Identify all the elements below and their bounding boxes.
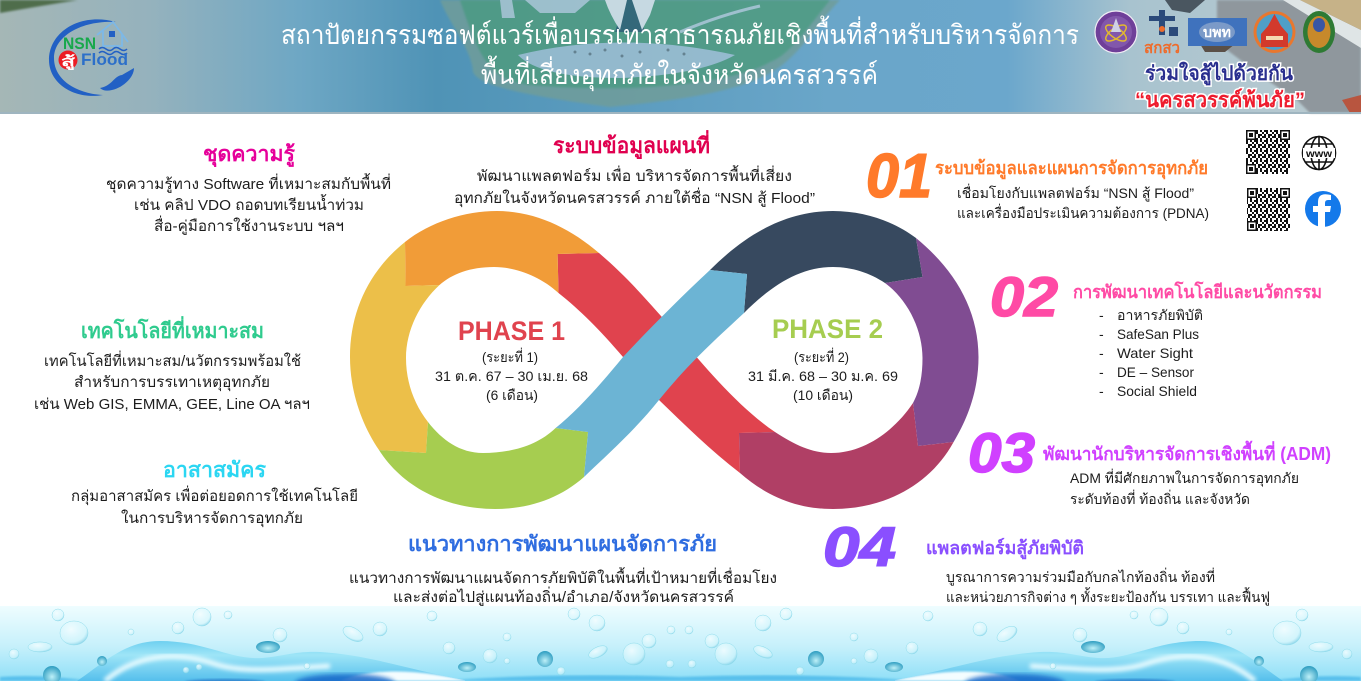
item 03: 03	[968, 421, 1035, 484]
item 02: Social Shield	[1117, 383, 1197, 399]
heading: ระบบข้อมูลแผนที่ block	[454, 129, 815, 208]
item 04: และหน่วยภารกิจต่าง ๆ ทั้งระยะป้องกัน บรรเทา และฟื้นฟู	[946, 587, 1270, 606]
heading: ระบบข้อมูลแผนที่ block: ระบบข้อมูลแผนที่	[553, 129, 710, 160]
heading: แนวทางการพัฒนาแผนจัดการภัย block: แนวทางการพัฒนาแผนจัดการภัยพิบัติในพื้นที่เป้าหมายที่เชื่อมโยง	[349, 567, 777, 587]
heading: อาสาสมัคร block: อาสาสมัคร	[163, 459, 267, 482]
item 01: และเครื่องมือประเมินความต้องการ (PDNA)	[957, 204, 1209, 221]
title	[281, 15, 1079, 92]
partner logos: สกสว	[1144, 40, 1180, 57]
partner logos: บพท	[1203, 24, 1231, 40]
heading: ชุดความรู้ block: ชุดความรู้ทาง Software ที่เหมาะสมกับพื้นที่	[106, 173, 391, 194]
item 01: เชื่อมโยงกับแพลตฟอร์ม “NSN สู้ Flood”	[957, 184, 1194, 202]
item 02: DE – Sensor	[1117, 364, 1194, 380]
phase 2 label: PHASE 2	[772, 314, 883, 344]
heading: ระบบข้อมูลแผนที่ block: อุทกภัยในจังหวัดนครสวรรค์ ภายใต้ชื่อ “NSN สู้ Flood”	[454, 187, 815, 208]
item 01	[866, 142, 1209, 221]
slogan	[1135, 61, 1305, 112]
heading: ระบบข้อมูลแผนที่ block: พัฒนาแพลตฟอร์ม เพื่อ บริหารจัดการพื้นที่เสี่ยง	[477, 165, 792, 185]
item 04: แพลตฟอร์มสู้ภัยพิบัติ	[926, 537, 1084, 560]
heading: อาสาสมัคร block: กลุ่มอาสาสมัคร เพื่อต่อยอดการใช้เทคโนโลยี	[71, 485, 358, 506]
item 02: การพัฒนาเทคโนโลยีและนวัตกรรม	[1073, 281, 1322, 302]
heading: ชุดความรู้ block: สื่อ-คู่มือการใช้งานระบบ ฯลฯ	[154, 215, 344, 235]
phase 2 label: (10 เดือน)	[793, 387, 853, 403]
item 01: 01	[866, 142, 932, 211]
item 01: ระบบข้อมูลและแผนการจัดการอุทกภัย	[935, 158, 1208, 180]
icon: facebook	[1305, 191, 1341, 227]
item 02: 02	[990, 265, 1058, 328]
heading: แนวทางการพัฒนาแผนจัดการภัย block	[349, 533, 777, 606]
heading: อาสาสมัคร block: ในการบริหารจัดการอุทกภัย	[121, 509, 303, 528]
item 02: -	[1099, 383, 1104, 399]
phase 2 label: (ระยะที่ 2)	[794, 348, 849, 365]
heading: เทคโนโลยีที่เหมาะสม block: เทคโนโลยีที่เหมาะสม/นวัตกรรมพร้อมใช้	[44, 350, 301, 370]
logo: NSN สู้ Flood: Flood	[81, 50, 128, 69]
slogan: ร่วมใจสู้ไปด้วยกัน	[1145, 61, 1293, 87]
item 02: -	[1099, 326, 1104, 342]
infinity diagram	[350, 211, 978, 509]
icon: globe www	[1302, 136, 1336, 170]
title: พื้นที่เสี่ยงอุทกภัยในจังหวัดนครสวรรค์	[481, 55, 878, 92]
heading: เทคโนโลยีที่เหมาะสม block: เทคโนโลยีที่เหมาะสม	[81, 315, 264, 343]
heading: เทคโนโลยีที่เหมาะสม block	[34, 315, 310, 413]
phase 1 label: (ระยะที่ 1)	[482, 348, 538, 365]
item 04	[823, 515, 1270, 606]
phase 1 label: (6 เดือน)	[486, 387, 538, 403]
partner logos	[1095, 10, 1335, 57]
item 03: ADM ที่มีศักยภาพในการจัดการอุทกภัย	[1070, 469, 1299, 487]
slogan: “นครสวรรค์พ้นภัย”	[1135, 88, 1305, 112]
item 02: อาหารภัยพิบัติ	[1117, 307, 1203, 323]
heading: อาสาสมัคร block	[71, 459, 358, 528]
phase 2 label	[748, 314, 898, 403]
logo: NSN สู้ Flood: สู้	[61, 53, 76, 70]
QR code: facebook	[1247, 188, 1290, 231]
heading: แนวทางการพัฒนาแผนจัดการภัย block: และส่งต่อไปสู่แผนท้องถิ่น/อำเภอ/จังหวัดนครสวรรค์	[393, 586, 734, 606]
phase 1 label: PHASE 1	[458, 316, 565, 346]
heading: เทคโนโลยีที่เหมาะสม block: สำหรับการบรรเทาเหตุอุทกภัย	[74, 374, 270, 392]
item 03: ระดับท้องที่ ท้องถิ่น และจังหวัด	[1070, 490, 1250, 507]
item 04: บูรณาการความร่วมมือกับกลไกท้องถิ่น ท้องที่	[946, 568, 1215, 586]
logo: NSN สู้ Flood: NSN	[63, 34, 96, 53]
icon: globe www: www	[1305, 149, 1332, 160]
phase 2 label: 31 มี.ค. 68 – 30 ม.ค. 69	[748, 368, 898, 384]
item 03: พัฒนานักบริหารจัดการเชิงพื้นที่ (ADM)	[1043, 440, 1331, 464]
phase 1 label	[435, 316, 588, 403]
item 04: 04	[823, 515, 896, 578]
header banner	[0, 0, 1361, 114]
item 02: -	[1099, 345, 1104, 361]
title: สถาปัตยกรรมซอฟต์แวร์เพื่อบรรเทาสาธารณภัยเชิงพื้นที่สำหรับบริหารจัดการ	[281, 15, 1079, 50]
logo: NSN สู้ Flood	[49, 19, 134, 96]
item 02: SafeSan Plus	[1117, 326, 1199, 342]
item 02	[990, 265, 1322, 399]
heading: แนวทางการพัฒนาแผนจัดการภัย block: แนวทางการพัฒนาแผนจัดการภัย	[408, 533, 717, 556]
heading: เทคโนโลยีที่เหมาะสม block: เช่น Web GIS, EMMA, GEE, Line OA ฯลฯ	[34, 396, 310, 413]
item 02: -	[1099, 364, 1104, 380]
heading: ชุดความรู้ block: ชุดความรู้	[203, 142, 296, 168]
item 03	[968, 421, 1331, 507]
heading: ชุดความรู้ block	[106, 142, 391, 235]
footer water band	[0, 606, 1361, 681]
heading: ชุดความรู้ block: เช่น คลิป VDO ถอดบทเรียนน้ำท่วม	[134, 194, 364, 214]
QR code: website	[1246, 130, 1290, 174]
phase 1 label: 31 ต.ค. 67 – 30 เม.ย. 68	[435, 368, 588, 384]
item 02: -	[1099, 307, 1104, 323]
item 02: Water Sight	[1117, 345, 1193, 361]
